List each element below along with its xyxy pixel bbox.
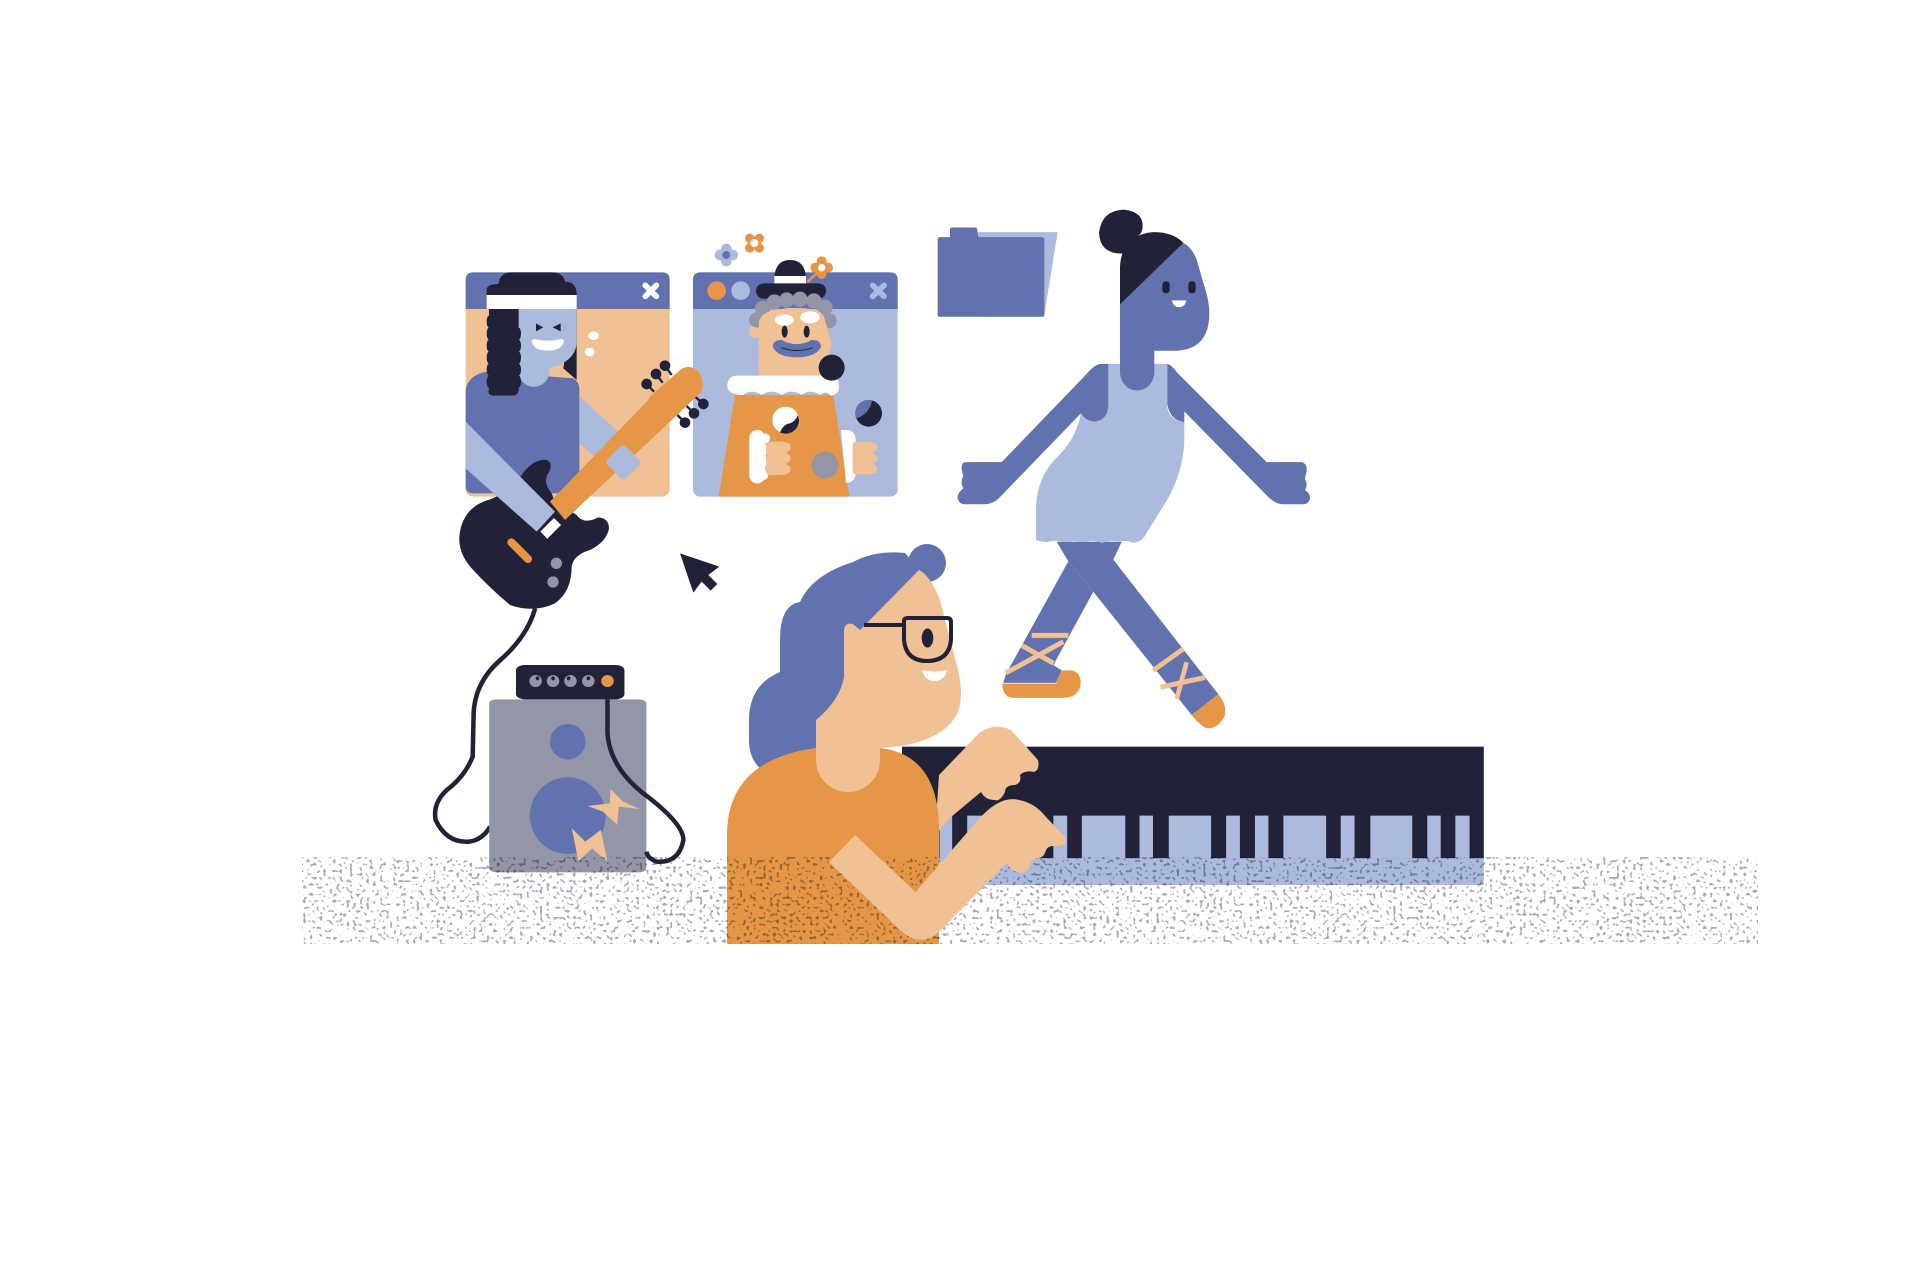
keyboard xyxy=(902,747,1484,885)
pianist face and neck xyxy=(816,570,961,792)
guitarist far arm xyxy=(579,397,620,458)
guitar tuners xyxy=(641,360,709,428)
pianist eye xyxy=(922,628,933,648)
guitar neck xyxy=(550,367,703,520)
juggling ball: white and navy xyxy=(772,407,799,434)
icon: close cross xyxy=(645,285,656,296)
keyboard white keys xyxy=(940,816,1470,858)
window: clown video call xyxy=(693,234,898,497)
window title bar xyxy=(693,272,898,309)
shirt cuff xyxy=(540,518,561,539)
pianist shirt xyxy=(727,748,939,944)
clown eyebrows xyxy=(775,311,820,326)
headband xyxy=(487,295,577,309)
pianist front arm xyxy=(829,799,1066,940)
keyboard front strip xyxy=(920,858,1484,885)
clown hat xyxy=(756,260,826,299)
guitarist hair top xyxy=(487,272,577,295)
ballerina left arm xyxy=(958,364,1108,504)
clown collar xyxy=(727,376,839,396)
lightning bolts xyxy=(572,789,640,862)
ballerina xyxy=(958,210,1310,728)
keyboard body xyxy=(902,747,1484,858)
guitar cable xyxy=(435,608,535,842)
clown hair xyxy=(749,292,837,328)
icon: mouse cursor xyxy=(680,553,719,593)
ballerina rear leg and shoe xyxy=(1002,561,1093,698)
clown left hand xyxy=(766,442,791,475)
flower: light blue xyxy=(715,244,738,266)
clown ear xyxy=(749,325,762,338)
guitarist shirt xyxy=(466,372,579,493)
amplifier head xyxy=(516,665,624,699)
ballerina smile xyxy=(1172,300,1186,307)
ballerina head and neck xyxy=(1120,243,1209,391)
guitarist back hair xyxy=(563,309,577,380)
ballerina hair xyxy=(1120,232,1183,304)
amplifier cable xyxy=(608,699,683,862)
icon: folder xyxy=(938,227,1058,317)
guitar pickup xyxy=(511,542,528,559)
guitarist face xyxy=(518,309,577,387)
pianist hair xyxy=(749,552,930,775)
guitarist fretting hand xyxy=(605,444,642,481)
juggling ball: blue and navy xyxy=(855,400,882,427)
amplifier cabinet xyxy=(489,699,646,872)
pianist back arm xyxy=(935,727,1038,835)
sweat drops xyxy=(585,331,599,356)
ballerina bun xyxy=(1099,210,1143,254)
window control buttons xyxy=(707,281,750,300)
juggling ball: navy xyxy=(819,355,845,381)
guitarist smile xyxy=(532,339,564,351)
guitar body xyxy=(459,460,609,609)
clown left sleeve xyxy=(749,430,770,483)
stippled ground xyxy=(302,857,1758,944)
guitarist eyes xyxy=(536,323,561,331)
pianist hair bun xyxy=(908,544,946,582)
ballerina right arm xyxy=(1167,364,1310,504)
clown mouth xyxy=(773,340,821,357)
clown right sleeve xyxy=(841,430,859,483)
pianist glasses xyxy=(864,618,951,661)
pianist xyxy=(727,544,1038,944)
ballerina eyes xyxy=(1162,281,1196,293)
flower: hat flower xyxy=(807,256,833,282)
clown eyes xyxy=(782,326,810,338)
guitarist long hair xyxy=(487,309,521,396)
icon: close cross xyxy=(873,285,884,296)
clown right hand xyxy=(853,442,877,474)
pianist smile xyxy=(922,670,947,681)
guitarist strumming arm xyxy=(466,422,555,532)
window body xyxy=(466,272,670,497)
window body xyxy=(693,272,898,497)
window: guitarist video call xyxy=(459,272,709,609)
ballerina dress xyxy=(1036,364,1184,543)
juggling ball: grey xyxy=(812,452,838,478)
ballerina front leg and shoe xyxy=(1057,542,1225,728)
guitar knobs xyxy=(547,558,562,588)
clown face xyxy=(758,308,832,378)
amplifier and cable xyxy=(435,608,683,872)
window title bar xyxy=(466,272,670,309)
amplifier small speaker xyxy=(550,724,586,759)
flower: orange xyxy=(745,234,764,253)
clown body xyxy=(719,395,849,497)
amplifier knobs xyxy=(529,675,614,687)
amplifier large speaker xyxy=(530,777,606,854)
